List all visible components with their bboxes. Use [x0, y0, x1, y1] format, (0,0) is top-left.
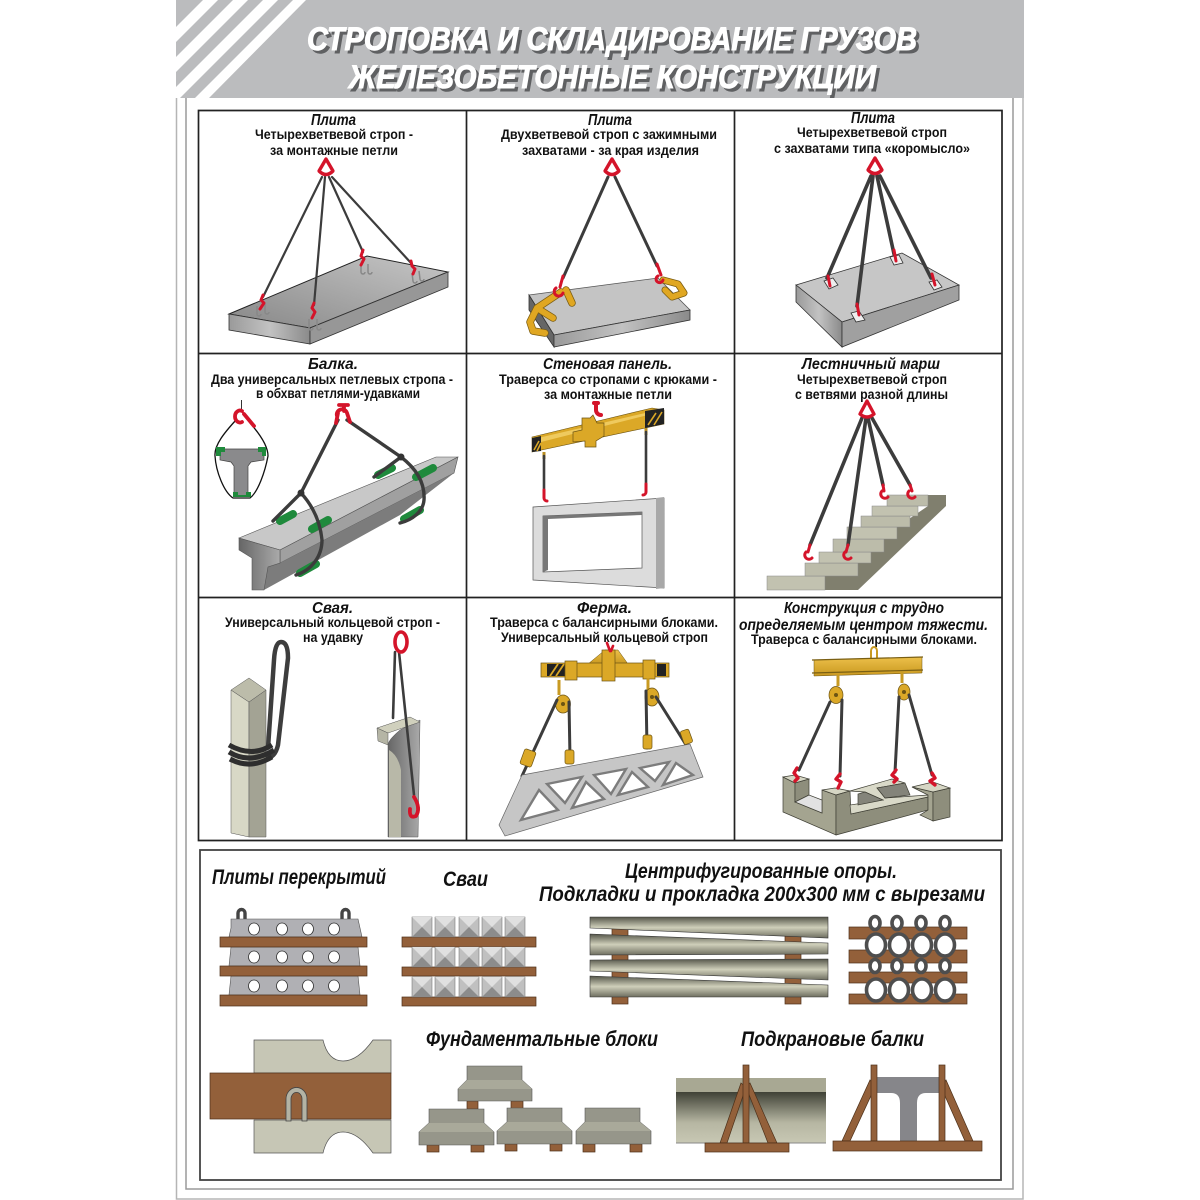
panel: plate, four-leg sling with grabs [774, 110, 970, 347]
icon: traverse with pulleys [541, 643, 669, 713]
panel: plate, four-leg sling with grabs: Четырехветвевой строп [797, 125, 947, 140]
heading: foundation blocks: Фундаментальные блоки [426, 1028, 658, 1051]
heading: floor slabs: Плиты перекрытий [212, 866, 386, 889]
title: ЖЕЛЕЗОБЕТОННЫЕ КОНСТРУКЦИИ [347, 59, 877, 95]
panel: plate, four-leg sling to lifting loops: Плита [311, 112, 356, 129]
panel: truss with traverse: Ферма. [577, 600, 632, 617]
icon: concrete truss [499, 744, 703, 836]
panel: beam, two choker slings [211, 356, 458, 590]
icon: foundation blocks stack [419, 1066, 651, 1152]
panel: wall panel with traverse: Стеновая панель. [543, 356, 672, 373]
panel: wall panel with traverse: Траверса со стропами с крюками - [499, 372, 717, 387]
icon: stairs [767, 495, 946, 590]
icon: pile stack [402, 917, 536, 1006]
heading: piles: Сваи [443, 868, 488, 891]
panel: plate, four-leg sling to lifting loops: Четырехветвевой строп - [255, 127, 413, 142]
panel: pile, ring sling: Универсальный кольцевой строп - [225, 615, 440, 630]
icon: wall panel [533, 497, 664, 589]
panel: beam, two choker slings: Два универсальных петлевых стропа - [211, 372, 453, 387]
panel: plate, two-leg sling with clamps: Плита [588, 112, 632, 129]
panel: stair flight: Лестничный марш [801, 356, 940, 373]
icon: tapered poles on timbers [590, 917, 828, 1004]
heading: crane beams: Подкрановые балки [741, 1028, 924, 1051]
panel: structure with unknown centre of gravity [739, 600, 988, 835]
panel: plate, four-leg sling with grabs: с захватами типа «коромысло» [774, 141, 970, 156]
panel: truss with traverse: Универсальный кольцевой строп [501, 630, 708, 645]
panel: plate, four-leg sling with grabs: Плита [851, 110, 895, 127]
panel: stair flight: с ветвями разной длины [795, 387, 948, 402]
panel: plate, two-leg sling with clamps: Двухветвевой строп с зажимными [501, 127, 717, 142]
title: СТРОПОВКА И СКЛАДИРОВАНИЕ ГРУЗОВ [310, 24, 920, 60]
icon: square pile with choke [229, 642, 288, 837]
panel: plate, four-leg sling to lifting loops: за монтажные петли [270, 143, 398, 158]
panel: pile, ring sling: на удавку [303, 630, 363, 645]
icon: crane beam cross-section [833, 1065, 982, 1151]
icon: column with hook [377, 632, 420, 837]
heading: centrifuged poles: Подкладки и прокладка 200х300 мм с вырезами [539, 883, 985, 906]
panel: truss with traverse [490, 600, 718, 836]
icon: T-beam [239, 457, 458, 590]
panel: wall panel with traverse [499, 356, 717, 589]
panel: beam, two choker slings: в обхват петлями-удавками [256, 386, 420, 401]
rigging table [198, 110, 1002, 840]
panel: plate, two-leg sling with clamps: захватами - за края изделия [522, 143, 699, 158]
icon: crane beam side view [676, 1065, 826, 1152]
title: ЖЕЛЕЗОБЕТОННЫЕ КОНСТРУКЦИИ [350, 62, 880, 98]
panel: structure with unknown centre of gravity: Траверса с балансирными блоками. [751, 632, 977, 647]
panel: pile, ring sling: Свая. [312, 600, 353, 617]
icon: I-beam traverse with pulleys [812, 647, 923, 704]
heading: centrifuged poles: Центрифугированные опоры. [625, 860, 897, 883]
header band [176, 0, 1024, 98]
icon: yellow traverse [532, 408, 664, 459]
icon: truss clamps [520, 729, 693, 768]
panel: structure with unknown centre of gravity: определяемым центром тяжести. [739, 617, 988, 634]
panel: stair flight: Четырехветвевой строп [797, 372, 947, 387]
heading: centrifuged poles [539, 860, 985, 906]
icon: beam cross section [215, 400, 268, 498]
panel: wall panel with traverse: за монтажные петли [544, 387, 672, 402]
panel: plate, four-leg sling to lifting loops [229, 112, 448, 344]
icon: pole ends stack [849, 916, 967, 1004]
icon: timber spacer with cut-outs [210, 1040, 391, 1153]
icon: concrete block [783, 775, 950, 835]
page frame [176, 98, 1023, 1199]
panel: beam, two choker slings: Балка. [308, 356, 358, 373]
panel: truss with traverse: Траверса с балансирными блоками. [490, 615, 718, 630]
title: СТРОПОВКА И СКЛАДИРОВАНИЕ ГРУЗОВ [307, 21, 917, 57]
panel: pile, ring sling [225, 600, 440, 837]
panel: plate, two-leg sling with clamps [501, 112, 717, 347]
panel: structure with unknown centre of gravity: Конструкция с трудно [784, 600, 944, 617]
panel: storage [200, 850, 1001, 1180]
panel: stair flight [767, 356, 948, 590]
title [307, 21, 920, 98]
icon: floor slab stack [220, 910, 367, 1006]
